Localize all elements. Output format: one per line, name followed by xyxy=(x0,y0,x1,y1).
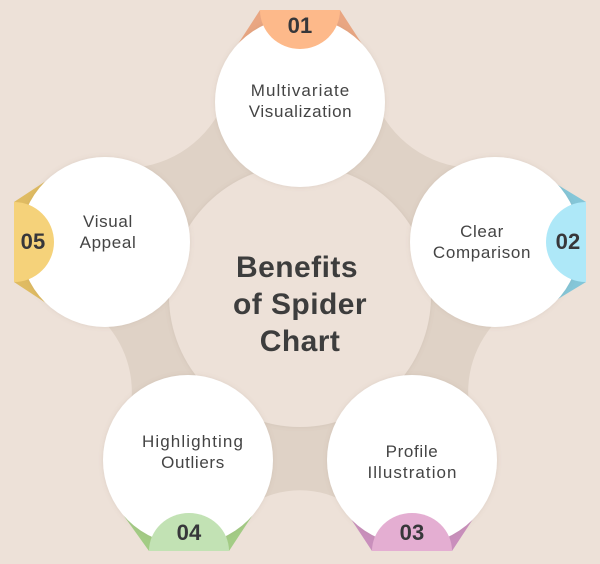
item 04: Highlighting Outliers: Highlighting xyxy=(142,432,244,451)
item 01: Multivariate Visualization: Multivariate xyxy=(251,81,350,100)
tab 05 folds xyxy=(14,177,52,307)
item 02: Clear Comparison: Comparison xyxy=(433,243,531,262)
item 05: Visual Appeal: Visual xyxy=(83,212,133,231)
item 04: Highlighting Outliers: Outliers xyxy=(161,453,225,472)
connecting band xyxy=(95,100,505,505)
item 02: Clear Comparison: Clear xyxy=(460,222,504,241)
item 03: Profile Illustration xyxy=(327,375,497,551)
item 03: Profile Illustration: 03 xyxy=(400,520,424,545)
item 01: Multivariate Visualization xyxy=(215,10,385,187)
title: Chart xyxy=(260,325,340,358)
item 05: Visual Appeal: Appeal xyxy=(80,233,136,252)
tab 03 folds xyxy=(349,516,475,551)
item 03: Profile Illustration: Illustration xyxy=(367,463,458,482)
item 05: Visual Appeal xyxy=(14,157,190,327)
title xyxy=(233,251,367,358)
title: Benefits xyxy=(236,251,358,284)
item 02: Clear Comparison: 02 xyxy=(556,229,580,254)
tab 01 folds xyxy=(238,10,362,44)
item 01: Multivariate Visualization: Visualization xyxy=(249,102,352,121)
item 01: Multivariate Visualization: 01 xyxy=(288,13,312,38)
item 04: Highlighting Outliers xyxy=(103,375,273,551)
item 05: Visual Appeal: 05 xyxy=(21,229,45,254)
title: of Spider xyxy=(233,288,367,321)
item 02: Clear Comparison xyxy=(410,157,586,327)
tab 02 folds xyxy=(548,179,586,305)
tab 04 folds xyxy=(124,516,252,551)
item 04: Highlighting Outliers: 04 xyxy=(177,520,202,545)
centre circle xyxy=(169,165,431,427)
item 03: Profile Illustration: Profile xyxy=(386,442,438,461)
